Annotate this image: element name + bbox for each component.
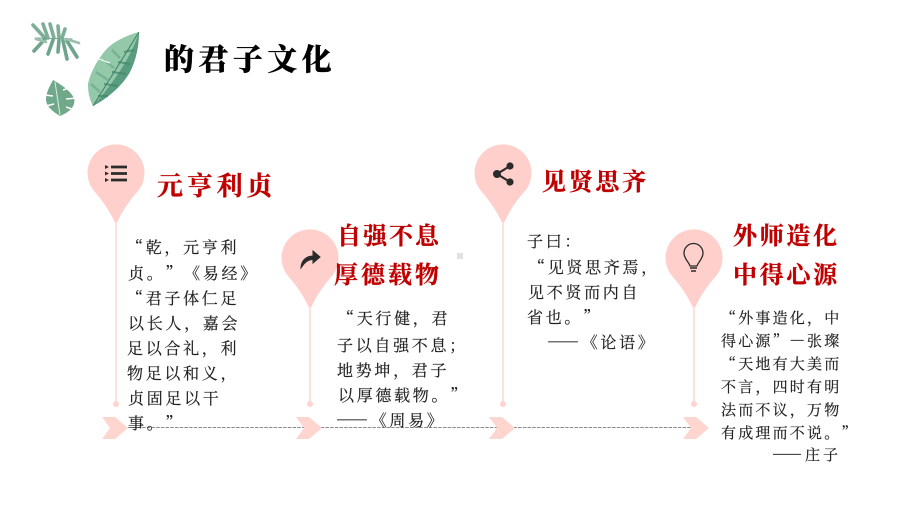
stem dot — [113, 401, 119, 407]
panel: 自强不息 厚德载物 — [282, 216, 469, 439]
quote text: 物足以和义， — [127, 361, 239, 384]
quote text — [127, 235, 259, 434]
quote text — [721, 307, 859, 465]
icon: large banana leaf — [88, 32, 139, 106]
quote text: ——《周易》 — [336, 408, 446, 431]
icon: fern leaf — [33, 24, 79, 59]
quote text: 得心源”—张璨 — [721, 330, 841, 351]
title: 的君子文化 — [164, 35, 336, 79]
stem dot — [307, 401, 313, 407]
heading: 见贤思齐 — [542, 162, 649, 197]
quote text: 贞固足以干 — [128, 386, 222, 409]
quote text: ——《论语》 — [547, 330, 657, 353]
quote text: “君子体仁足 — [127, 286, 239, 309]
panel: 元亨利贞 — [88, 144, 276, 439]
stem — [502, 222, 504, 404]
quote text: 不言，四时有明 — [721, 376, 841, 397]
heading: 中得心源 — [733, 255, 840, 290]
chevron — [102, 417, 128, 439]
stem — [309, 307, 311, 404]
panel: 外师造化 中得心源 — [666, 216, 859, 465]
quote text: 有成理而不说。” — [721, 422, 859, 443]
quote text: 子曰： — [527, 229, 583, 252]
quote text — [336, 306, 469, 431]
quote text: “外事造化，中 — [721, 307, 841, 328]
quote text: 省也。” — [527, 305, 602, 328]
quote text: 贞。”《易经》 — [128, 261, 259, 284]
quote text: 以厚德载物。” — [338, 383, 469, 406]
heading — [733, 216, 840, 290]
heading — [334, 216, 442, 290]
stem — [693, 307, 695, 404]
quote text: 事。” — [128, 411, 184, 434]
quote text — [527, 229, 660, 353]
quote text: 子以自强不息； — [337, 333, 468, 356]
quote text: ——庄子 — [772, 444, 841, 465]
heading: 自强不息 — [337, 216, 441, 251]
stem — [115, 222, 117, 404]
quote text: “天行健，君 — [338, 306, 450, 329]
quote text: “天地有大美而 — [721, 353, 841, 374]
heading: 厚德载物 — [334, 255, 442, 290]
chevron — [489, 417, 515, 439]
panel: 见贤思齐 — [474, 144, 660, 439]
heading: 外师造化 — [733, 216, 840, 251]
quote text: 地势坤，君子 — [337, 358, 449, 381]
icon: monstera leaf — [45, 80, 77, 116]
quote text: “见贤思齐焉， — [529, 255, 660, 278]
pin with light bulb icon — [666, 229, 722, 310]
dashed timeline — [128, 426, 695, 428]
chevron — [683, 417, 709, 439]
pin with share icon — [474, 144, 532, 225]
stem dot — [500, 401, 506, 407]
quote text: 以长人，嘉会 — [128, 311, 240, 334]
quote text: 见不贤而内自 — [528, 280, 640, 303]
decorative square marker — [457, 253, 463, 259]
pin with list icon — [88, 144, 144, 225]
chevron — [296, 417, 322, 439]
stem dot — [691, 401, 697, 407]
icon: watercolor leaves — [33, 24, 139, 116]
heading: 元亨利贞 — [157, 166, 276, 203]
quote text: 足以合礼，利 — [127, 336, 239, 359]
quote text: “乾，元亨利 — [127, 235, 239, 258]
quote text: 法而不议，万物 — [721, 399, 841, 420]
pin with arrow icon — [282, 229, 338, 310]
